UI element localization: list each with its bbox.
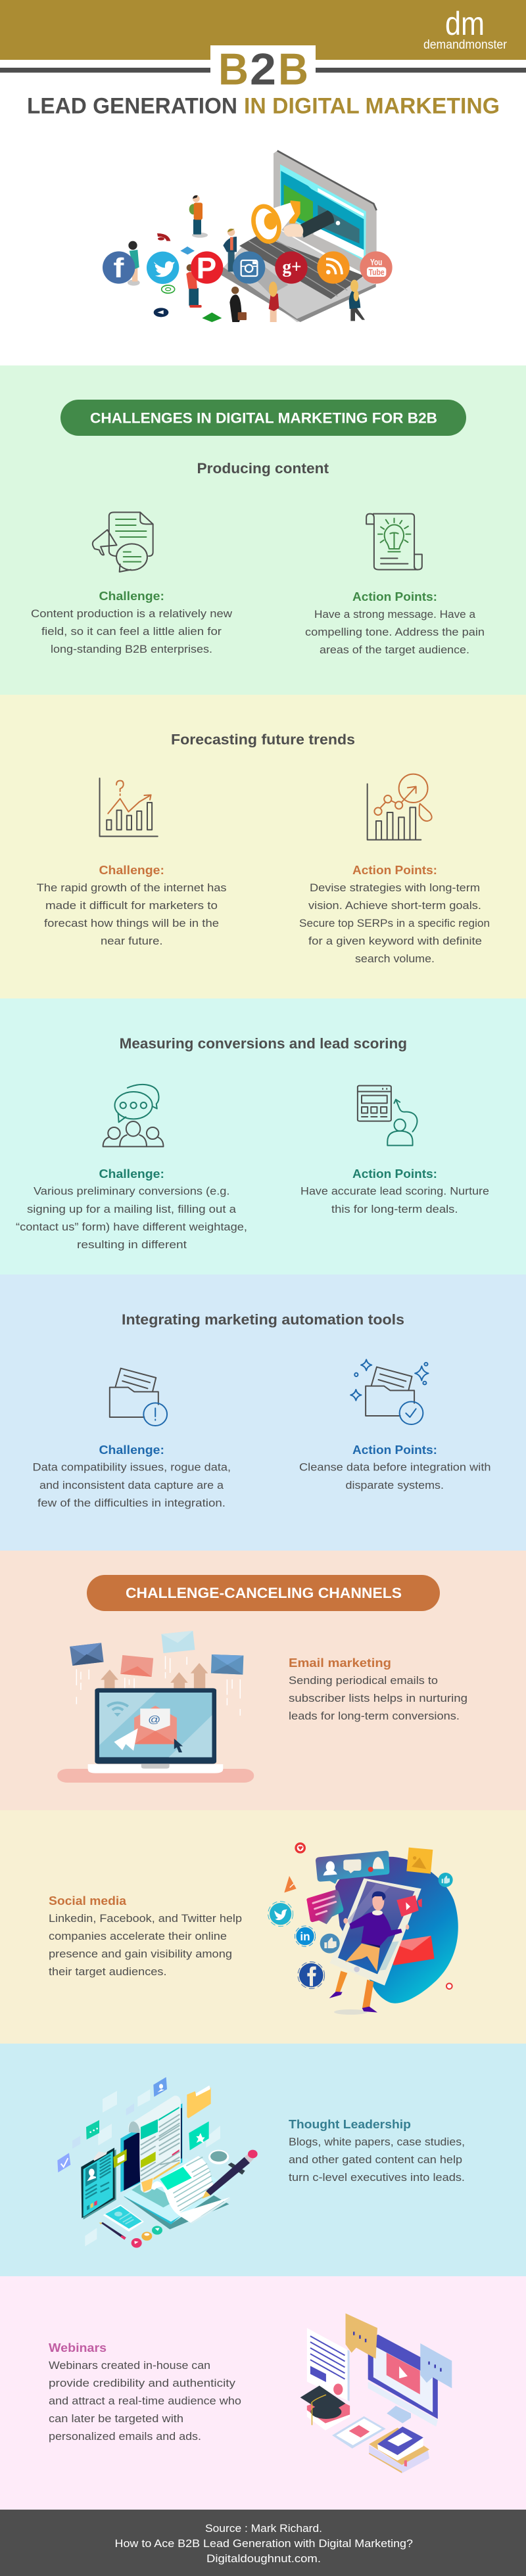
clipboard: [81, 2147, 116, 2220]
book and graduation cap: [300, 2385, 350, 2430]
heading: Forecasting future trends: [171, 731, 355, 748]
text: challenge: “contact us” form) have different weightage,: [16, 1221, 247, 1233]
pencil: [202, 2150, 258, 2199]
text: challenge: near future.: [101, 935, 163, 947]
logo: demandmonster: demandmonster: [423, 38, 508, 52]
icon: linkedin badge: in: [300, 1930, 310, 1943]
text: thought leadership: Blogs, white papers, case studies,: [289, 2136, 465, 2148]
text: action points: Action Points:: [352, 590, 437, 603]
text: action points: disparate systems.: [346, 1480, 444, 1491]
icon: twitter: [147, 252, 179, 284]
icon: scroll with light bulb: [366, 514, 422, 570]
envelope: [389, 1936, 435, 1965]
people: [128, 195, 365, 322]
motion lines: [76, 1656, 240, 1716]
icon: youtube: Tube: [369, 268, 385, 277]
text: webinars: and attract a real-time audience who: [49, 2395, 241, 2407]
text: email marketing: subscriber lists helps in nurturing: [289, 1693, 467, 1704]
icon: youtube: [360, 251, 393, 284]
icon: twitter badge: [268, 1902, 293, 1927]
text: social media: [49, 1894, 242, 1978]
text: challenge: signing up for a mailing list, filling out a: [27, 1204, 237, 1215]
email envelope: [134, 1706, 177, 1744]
text: social media: their target audiences.: [49, 1966, 167, 1978]
illustration: laptop sending emails: [57, 1631, 254, 1783]
icon: rss: [317, 251, 350, 284]
small pencil: [99, 2222, 126, 2239]
logo: demandmonster: dm: [445, 5, 485, 42]
arrows: [101, 1663, 208, 1688]
icon: thumbs up badge: [320, 1934, 340, 1954]
legs: [335, 1971, 347, 1993]
text: social media: Linkedin, Facebook, and Twitter help: [49, 1913, 242, 1925]
text: action points: Cleanse data before integration with: [299, 1462, 490, 1474]
text: action points: [299, 863, 490, 965]
title: B2B: [218, 45, 308, 95]
phone: [330, 1878, 421, 1986]
text: action points: [299, 1443, 490, 1491]
panel: thought leadership: [0, 2044, 526, 2276]
text: email marketing: Sending periodical emails to: [289, 1675, 438, 1687]
round buttons: [132, 2226, 162, 2248]
subtitle: LEAD GENERATION: [27, 93, 237, 118]
text: social media: Social media: [49, 1894, 127, 1908]
envelopes: [70, 1631, 243, 1677]
icon: facebook badge: [298, 1962, 325, 1988]
small floating icons: [154, 233, 222, 322]
panel: measuring conversions and lead scoring: [0, 998, 526, 1275]
icon: instagram: [233, 251, 265, 284]
small decorative badges: [284, 1844, 453, 1989]
notification bubble: [316, 1851, 389, 1884]
text: action points: Have a strong message. Have a: [314, 609, 476, 621]
subtitle: IN DIGITAL MARKETING: [244, 93, 500, 118]
text: webinars: Webinars created in-house can: [49, 2360, 210, 2372]
curved paper: [151, 2181, 230, 2223]
text: action points: Have accurate lead scoring. Nurture: [300, 1186, 489, 1198]
text: webinars: can later be targeted with: [49, 2413, 183, 2425]
illustration: person in phone with social icons: [268, 1844, 458, 2015]
phone card: [103, 2205, 144, 2232]
text: email marketing: leads for long-term conversions.: [289, 1710, 460, 1722]
text: challenge: [16, 1167, 247, 1251]
text: challenge: [31, 589, 232, 655]
text: challenge: Content production is a relatively new: [31, 608, 232, 620]
icon: dashboard with person: [358, 1086, 417, 1146]
footer: source: Digitaldoughnut.com.: [206, 2553, 321, 2565]
subtitle: [27, 93, 500, 118]
footer: source: How to Ace B2B Lead Generation with Digital Marketing?: [114, 2538, 413, 2550]
text: thought leadership: [289, 2117, 465, 2184]
person: [345, 1944, 380, 1971]
stacked books: [369, 2427, 429, 2473]
logo: demandmonster: [423, 5, 508, 52]
yellow speech bubble: [346, 2313, 377, 2358]
text: action points: Devise strategies with long-term: [310, 882, 480, 894]
text: challenge: long-standing B2B enterprises.: [51, 644, 212, 655]
illustration: webinar monitor, books and cap: [300, 2313, 452, 2473]
text: social media: companies accelerate their online: [49, 1931, 227, 1942]
pink message bubble: [306, 1890, 343, 1924]
banner: challenges heading: CHALLENGES IN DIGITAL MARKETING FOR B2B: [90, 410, 437, 426]
title: B2B: B: [218, 45, 249, 95]
panel: forecasting future trends: [0, 695, 526, 998]
title: B2B: 2: [250, 45, 276, 95]
text: challenge: Challenge:: [99, 1443, 164, 1457]
text: challenge: Challenge:: [99, 863, 164, 877]
document: [307, 2328, 350, 2401]
text: challenge: and inconsistent data capture are a: [39, 1480, 224, 1491]
text: action points: areas of the target audience.: [320, 644, 469, 656]
heading: Measuring conversions and lead scoring: [120, 1035, 407, 1052]
icon: folder with warning: [110, 1369, 167, 1426]
laptop: [219, 151, 377, 322]
text: action points: search volume.: [355, 953, 435, 965]
text: challenge: [37, 863, 227, 947]
footer: source: Source : Mark Richard.: [205, 2523, 322, 2535]
tablet: [332, 2416, 386, 2448]
icon: document, megaphone and speech bubble: [93, 512, 153, 572]
text: challenge: Data compatibility issues, rogue data,: [33, 1462, 231, 1474]
text: challenge: Challenge:: [99, 589, 164, 603]
text: challenge: resulting in different: [77, 1239, 187, 1251]
text: social media: presence and gain visibility among: [49, 1948, 232, 1960]
banner: channels heading: CHALLENGE-CANCELING CHANNELS: [126, 1585, 402, 1601]
megaphone and hand: [250, 200, 340, 245]
faded tiles: [72, 2089, 220, 2246]
text: webinars: provide credibility and authenticity: [49, 2377, 236, 2389]
icon: folder with check and sparkles: [350, 1359, 429, 1424]
text: action points: this for long-term deals.: [331, 1204, 458, 1215]
monitor: [368, 2335, 438, 2427]
panel: producing content: [0, 365, 526, 695]
text: challenge: forecast how things will be in the: [44, 918, 219, 929]
panel: integrating marketing automation tools: [0, 1275, 526, 1551]
text: action points: [300, 1167, 489, 1215]
blue speech bubble: [420, 2343, 452, 2388]
text: action points: compelling tone. Address the pain: [305, 626, 485, 638]
magnifier: [208, 2150, 245, 2174]
header banner: [0, 0, 526, 86]
yellow image card: [406, 1848, 433, 1874]
heading: Integrating marketing automation tools: [122, 1311, 404, 1328]
panel: email marketing: [0, 1551, 526, 1810]
heading: Producing content: [197, 460, 329, 477]
text: action points: [305, 590, 485, 656]
hero illustration: laptop, megaphone and social icons: [103, 151, 393, 322]
text: thought leadership: turn c-level executives into leads.: [289, 2172, 465, 2184]
text: email marketing: [289, 1656, 467, 1722]
text: thought leadership: and other gated content can help: [289, 2154, 462, 2166]
banner: channels heading: [87, 1575, 440, 1611]
text: thought leadership: Thought Leadership: [289, 2117, 411, 2131]
floating tags: [57, 2077, 211, 2172]
text: challenge: [33, 1443, 231, 1509]
icon: linkedin badge: [295, 1926, 316, 1946]
icon: facebook: [103, 251, 135, 284]
illustration: laptop sending emails: @: [148, 1715, 160, 1725]
text: action points: Action Points:: [352, 1167, 437, 1181]
text: action points: vision. Achieve short-term goals.: [308, 900, 481, 912]
text: webinars: personalized emails and ads.: [49, 2431, 201, 2443]
text: challenge: The rapid growth of the internet has: [37, 882, 227, 894]
icon: chart with magnifier: [368, 774, 432, 840]
long paper: [128, 2096, 181, 2193]
video tag: [396, 1895, 422, 1917]
text: action points: Secure top SERPs in a specific region: [299, 918, 490, 929]
panel: webinars: [0, 2276, 526, 2510]
icon: facebook: f: [113, 252, 124, 283]
icon: bar chart with question mark: [100, 778, 158, 836]
icon: pinterest: [191, 251, 223, 285]
icon: youtube: You: [370, 257, 382, 268]
footer: source: [0, 2510, 526, 2576]
panel: social media: [0, 1810, 526, 2044]
text: action points: Action Points:: [352, 1443, 437, 1457]
text: challenge: field, so it can feel a little alien for: [41, 626, 222, 638]
icon: google plus: g+: [282, 257, 302, 277]
text: webinars: [49, 2341, 241, 2443]
banner: challenges heading: [60, 400, 466, 436]
text: email marketing: Email marketing: [289, 1656, 391, 1670]
icon: group with speech bubbles: [103, 1085, 163, 1146]
text: action points: Action Points:: [352, 863, 437, 877]
text: webinars: Webinars: [49, 2341, 107, 2354]
text: challenge: made it difficult for marketers to: [45, 900, 218, 912]
icon: pinterest: P: [197, 251, 216, 285]
title: B2B: B: [278, 45, 308, 95]
illustration: isometric documents: [57, 2077, 258, 2248]
text: challenge: Various preliminary conversions (e.g.: [34, 1186, 230, 1198]
icon: google plus: [275, 251, 308, 284]
text: challenge: few of the difficulties in integration.: [37, 1497, 226, 1509]
text: action points: for a given keyword with definite: [308, 935, 482, 947]
text: challenge: Challenge:: [99, 1167, 164, 1181]
